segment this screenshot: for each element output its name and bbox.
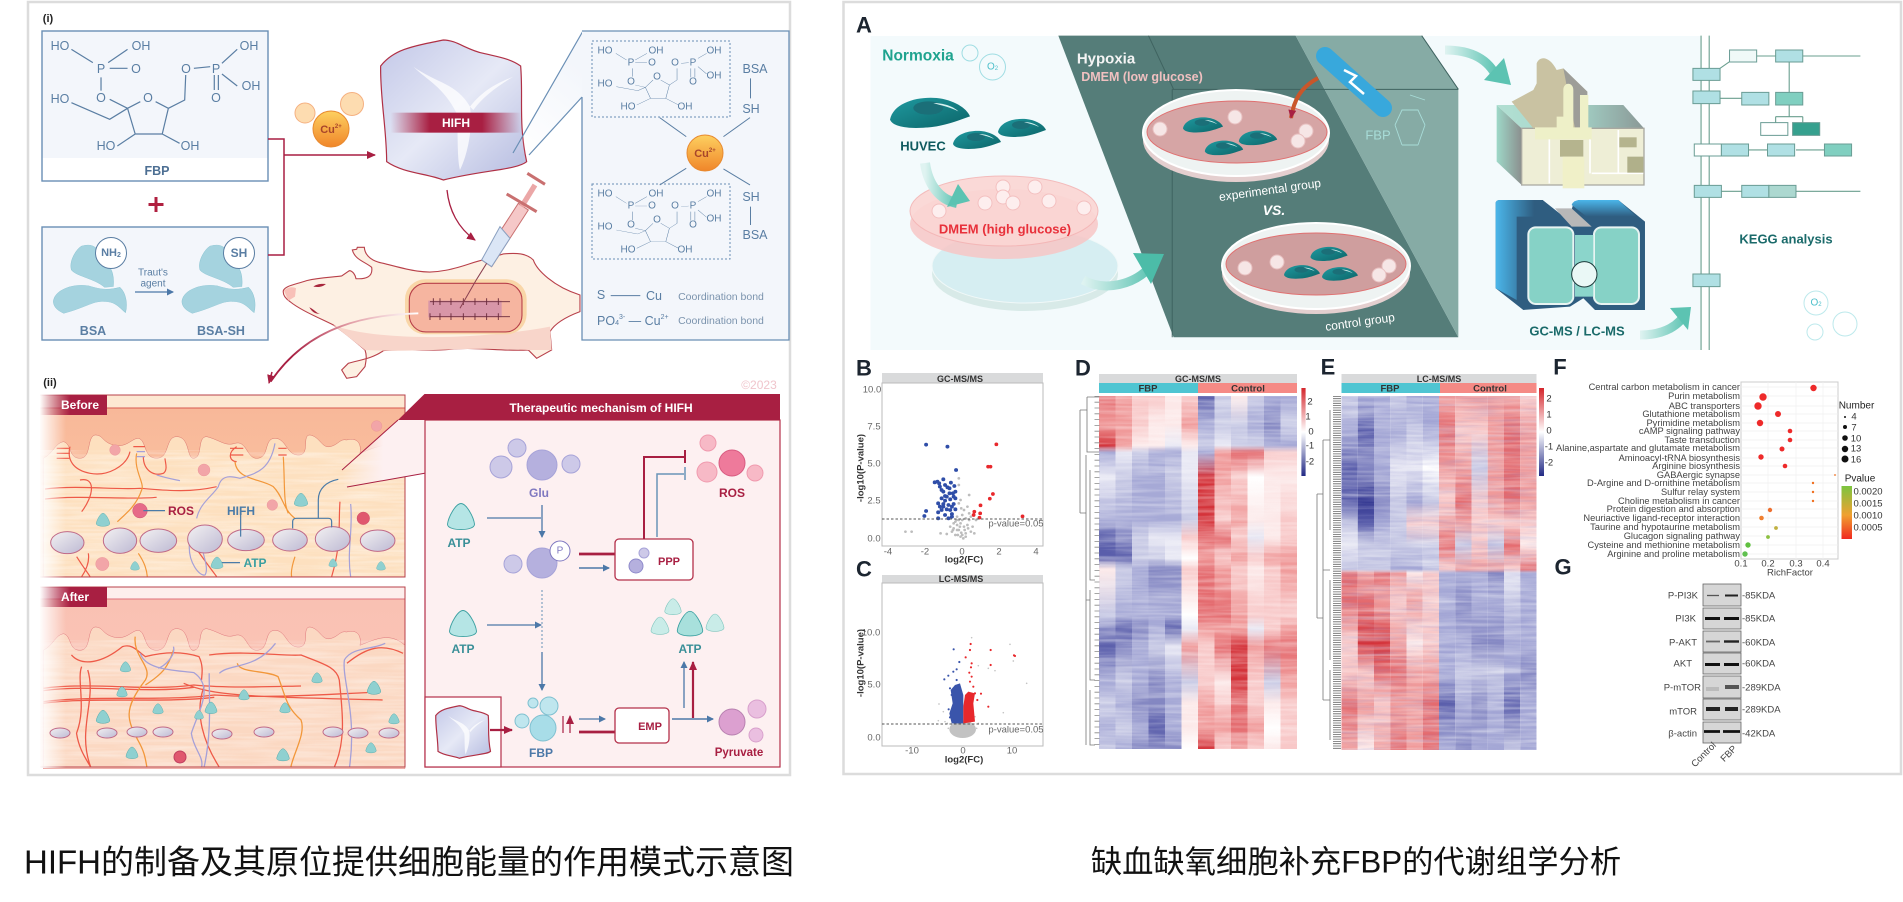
chart: KEGG enrichment bubble plot: 0.0020 <box>1853 486 1883 498</box>
chart: KEGG enrichment bubble plot: Central carbon metabolism in cancer <box>1589 382 1740 392</box>
icon: O2 bubbles KEGG <box>1804 291 1857 340</box>
chart: LC-MS volcano plot <box>856 574 1044 766</box>
chart: GC-MS volcano plot: p-value=0.05 <box>988 518 1044 530</box>
chart: western blot: -42KDA <box>1742 728 1776 740</box>
panel letter D: D <box>1075 356 1091 380</box>
chart: KEGG enrichment bubble plot: 13 <box>1851 444 1861 454</box>
box: BSA to BSA-SH: BSA <box>80 324 106 338</box>
chart: KEGG enrichment bubble plot: 0.0015 <box>1853 498 1883 510</box>
icon: Cu2+ ions: Cu <box>320 124 335 136</box>
box: FBP structure: O <box>131 62 141 76</box>
chart: KEGG enrichment bubble plot: Taste transduction <box>1665 435 1740 445</box>
box: BSA to BSA-SH: SH <box>231 246 247 260</box>
node: ATP upper: ATP <box>447 536 471 550</box>
callout: coordination structure: OH <box>648 46 664 56</box>
chart: LC-MS heatmap: 0 <box>1546 426 1552 436</box>
callout: coordination structure: OH <box>706 70 722 82</box>
callout: coordination structure: OH <box>648 188 664 200</box>
chart: western blot: -60KDA <box>1742 658 1776 670</box>
node: ATP lower: ATP <box>451 642 475 656</box>
callout: coordination structure: 4 <box>615 320 619 326</box>
chart: GC-MS volcano plot <box>856 373 1044 566</box>
chart: GC-MS heatmap: -1 <box>1306 440 1314 452</box>
arrow: up to ATP blue <box>683 662 685 708</box>
box: HIFH cube inset <box>425 697 501 767</box>
chart: western blot: -289KDA <box>1742 682 1781 694</box>
node: FBP <box>515 697 558 760</box>
illustration: FBP capsule <box>1325 56 1383 108</box>
chart: LC-MS volcano plot: 5.0 <box>867 680 881 690</box>
callout: coordination structure: Cu <box>694 148 709 160</box>
chart: KEGG enrichment bubble plot <box>1556 382 1883 578</box>
panel letter G: G <box>1554 554 1572 580</box>
chart: GC-MS volcano plot: 0 <box>959 546 965 558</box>
arrow: EMP to pyruvate <box>672 718 713 720</box>
chart: KEGG enrichment bubble plot: 0.0005 <box>1853 522 1883 534</box>
box: FBP structure: O <box>143 91 153 105</box>
chart: KEGG enrichment bubble plot: D-Argine and D-ornithine metabolism <box>1587 478 1740 488</box>
chart: GC-MS volcano plot: 5.0 <box>867 458 881 470</box>
box: FBP structure: FBP <box>144 164 170 178</box>
chart: GC-MS heatmap: 1 <box>1305 412 1311 422</box>
callout cone: zoom to mechanism <box>342 420 426 487</box>
chart: western blot: -60KDA <box>1742 638 1776 648</box>
chart: KEGG enrichment bubble plot: Number <box>1839 400 1875 412</box>
node: pyruvate <box>715 700 766 759</box>
chart: KEGG enrichment bubble plot: 0.4 <box>1816 558 1830 570</box>
heading banner <box>398 394 780 420</box>
arrow: ATP lower consumed <box>487 624 541 626</box>
arrow: tail of injection site to detail <box>269 372 272 383</box>
label: KEGG analysis: KEGG analysis <box>1739 232 1833 246</box>
chart: GC-MS volcano plot: 2 <box>996 546 1002 558</box>
illustration: high glucose dish <box>910 176 1118 311</box>
callout: coordination structure: O <box>653 214 661 226</box>
panel: before treatment skin: ATP <box>243 556 267 570</box>
chart: GC-MS volcano plot: GC-MS/MS <box>937 374 983 384</box>
arrows: glucose phosphorylation <box>487 505 542 537</box>
illustration: syringe <box>460 173 545 308</box>
illustration: HIFH hydrogel block <box>381 40 527 180</box>
heading banner: Therapeutic mechanism of HIFH <box>509 401 693 415</box>
panel: metabolomics figure <box>844 2 1901 774</box>
pathway: dotted to FBP <box>541 590 543 650</box>
chart: GC-MS volcano plot: log2(FC) <box>945 554 983 566</box>
chart: western blot <box>1664 584 1781 770</box>
chart: GC-MS heatmap: Control <box>1231 384 1265 394</box>
callout: coordination structure: O <box>648 58 656 68</box>
chart: GC-MS heatmap: -2 <box>1306 456 1314 468</box>
chart: KEGG enrichment bubble plot: Sulfur relay system <box>1661 487 1740 497</box>
callout: coordination structure: HO <box>598 188 613 200</box>
box: FBP structure: OH <box>181 139 199 153</box>
chart: GC-MS heatmap: 0 <box>1308 426 1314 438</box>
node: phosphorylated glucose: P <box>557 546 564 556</box>
callout: coordination structure: Coordination bond <box>678 291 764 303</box>
node: phosphorylated glucose <box>504 541 570 578</box>
label: VS.: VS. <box>1263 202 1285 218</box>
chart: KEGG enrichment bubble plot: Arginine and proline metabolism <box>1607 549 1740 559</box>
illustration: rat with implanted hydrogel <box>271 247 580 382</box>
chart: KEGG pathway map <box>1693 36 1860 350</box>
panel letter B: B <box>856 356 872 380</box>
callout: coordination structure: HO <box>598 222 613 232</box>
node: ATP upper <box>447 504 474 550</box>
panel: after treatment skin: After <box>61 590 89 604</box>
box: FBP structure: OH <box>240 39 258 53</box>
callout: coordination structure: OH <box>678 102 692 112</box>
chart: KEGG enrichment bubble plot: ABC transporters <box>1669 401 1740 411</box>
chart: KEGG enrichment bubble plot: RichFactor <box>1767 568 1813 578</box>
chart: KEGG enrichment bubble plot: Glucagon signaling pathway <box>1624 531 1740 541</box>
caption: right figure: 缺血缺氧细胞补充FBP的代谢组学分析 <box>1091 844 1621 880</box>
chart: KEGG enrichment bubble plot: 10 <box>1851 434 1861 444</box>
illustration: LC-MS instrument <box>1496 200 1645 310</box>
label: control group: control group <box>1324 310 1396 334</box>
callout: coordination structure: BSA <box>742 62 768 76</box>
box: BSA to BSA-SH: Traut's <box>138 268 168 278</box>
box: FBP structure: HO <box>51 92 70 106</box>
panel: HIFH preparation and mode of action figure <box>28 2 790 775</box>
box: BSA to BSA-SH: 2 <box>117 252 121 258</box>
chart: KEGG enrichment bubble plot: GABAergic synapse <box>1657 470 1740 480</box>
panel: before treatment skin <box>39 394 405 578</box>
callout: coordination structure: 3- <box>619 314 626 320</box>
callout: coordination structure: O <box>627 220 635 230</box>
callout: coordination structure: O <box>689 220 697 230</box>
arrow: to PPP red <box>579 553 630 555</box>
chart: GC-MS volcano plot: 7.5 <box>867 422 881 432</box>
chart: KEGG enrichment bubble plot: Protein digestion and absorption <box>1607 504 1740 514</box>
arrow: to EMP blue <box>579 718 605 720</box>
callout: coordination structure: O <box>671 58 679 68</box>
callout: coordination structure: — Cu <box>625 314 661 328</box>
chart: western blot: P-AKT <box>1669 638 1697 648</box>
arrow: down to FBP <box>541 652 543 690</box>
box: FBP structure: HO <box>97 139 116 153</box>
chart: KEGG enrichment bubble plot: Pyrimidine metabolism <box>1646 418 1740 428</box>
chart: KEGG enrichment bubble plot: Cysteine and methionine metabolism <box>1588 540 1740 550</box>
chart: LC-MS heatmap: -2 <box>1545 458 1553 468</box>
arrow: to PPP blue <box>579 567 609 569</box>
callout: coordination structure: OH <box>706 188 722 200</box>
chart: LC-MS heatmap: FBP <box>1380 384 1400 394</box>
chart: GC-MS volcano plot: 4 <box>1033 546 1039 558</box>
chart: western blot: -85KDA <box>1742 614 1776 624</box>
chart: GC-MS volcano plot: -4 <box>884 546 892 558</box>
chart: western blot: P-PI3K <box>1668 590 1699 602</box>
inhibition line: PPP to ROS red <box>644 450 685 539</box>
chart: western blot: β-actin <box>1668 728 1697 740</box>
callout: coordination structure: P <box>690 58 697 68</box>
chart: LC-MS volcano plot: 0.0 <box>867 732 881 744</box>
chart: KEGG enrichment bubble plot: Alanine,aspartate and glutamate metabolism <box>1556 443 1740 453</box>
arrow: hydrogel to rat <box>447 190 475 240</box>
chart: LC-MS heatmap <box>1317 374 1553 750</box>
node: Glu: Glu <box>529 486 549 500</box>
icon: O2 bubbles normoxia: 2 <box>995 66 999 72</box>
chart: LC-MS volcano plot: -log10(P-value) <box>856 629 866 697</box>
arrow: FBP into dish <box>1291 78 1318 118</box>
chart: KEGG enrichment bubble plot: cAMP signaling pathway <box>1639 426 1740 436</box>
node: Glu <box>490 439 580 500</box>
callout: coordination structure: HO <box>620 102 636 112</box>
chart: GC-MS volcano plot: 0.0 <box>867 534 881 544</box>
panel letter C: C <box>856 556 872 582</box>
chart: KEGG enrichment bubble plot: Aminoacyl-tRNA biosynthesis <box>1619 453 1740 463</box>
label: normoxia: Normoxia <box>882 48 954 64</box>
callout: coordination structure: Cu <box>646 289 662 303</box>
caption: left figure: HIFH的制备及其原位提供细胞能量的作用模式示意图 <box>24 844 794 880</box>
chart: western blot: -289KDA <box>1742 704 1781 716</box>
callout: coordination structure: O <box>648 200 656 212</box>
label: experimental group: experimental group <box>1218 176 1322 204</box>
box: PPP <box>615 539 693 580</box>
chart: LC-MS heatmap: -1 <box>1545 442 1553 452</box>
arrow: cells into dish <box>925 163 970 207</box>
chart: LC-MS volcano plot: 10 <box>1007 746 1017 756</box>
chart: KEGG enrichment bubble plot: 0.3 <box>1789 558 1803 570</box>
box: FBP structure: O <box>181 62 191 76</box>
chart: LC-MS volcano plot: LC-MS/MS <box>939 574 983 584</box>
box: FBP structure <box>42 31 268 181</box>
callout: coordination structure: 2+ <box>709 148 716 154</box>
chart: GC-MS heatmap: 2 <box>1307 396 1313 408</box>
label: FBP with faint structure <box>1365 95 1425 145</box>
chart: KEGG enrichment bubble plot: Choline metabolism in cancer <box>1618 496 1740 506</box>
panel: after treatment skin <box>39 586 405 769</box>
callout: coordination structure: PO <box>597 314 615 328</box>
callout: coordination structure: HO <box>598 46 613 56</box>
chart: western blot: P-mTOR <box>1664 682 1701 694</box>
icon: plus sign <box>148 197 164 212</box>
box: FBP structure: P <box>97 62 105 76</box>
chart: western blot: FBP <box>1719 744 1739 764</box>
panel: before treatment skin: HIFH <box>227 504 255 518</box>
arrows: FBP increase <box>563 716 570 733</box>
callout: coordination structure: P <box>628 58 635 68</box>
icon: Cu2+ ions <box>295 92 364 147</box>
illustration: control dish <box>1222 223 1410 314</box>
signature: ©2023 <box>741 378 777 392</box>
illustration: high glucose dish: DMEM (high glucose) <box>939 222 1071 236</box>
chart: KEGG enrichment bubble plot: Pvalue <box>1845 474 1876 484</box>
arrow: to EMP red <box>579 731 630 733</box>
box: BSA to BSA-SH: BSA-SH <box>197 324 245 338</box>
callout: coordination structure: 2+ <box>661 314 669 320</box>
chart: KEGG enrichment bubble plot: 4 <box>1851 412 1857 422</box>
chart: LC-MS heatmap: Control <box>1473 384 1507 394</box>
node: pyruvate: Pyruvate <box>715 747 763 759</box>
callout: coordination structure: HO <box>598 78 613 90</box>
panel: therapeutic mechanism of HIFH <box>398 394 780 767</box>
chart: GC-MS volcano plot: 2.5 <box>867 496 881 506</box>
panel A: workflow background <box>870 36 1700 350</box>
chart: LC-MS volcano plot: 0 <box>960 746 966 756</box>
icon: O2 bubbles normoxia: O <box>987 62 995 72</box>
chart: LC-MS volcano plot: p-value=0.05 <box>988 724 1044 736</box>
chart: LC-MS volcano plot: -10 <box>905 746 919 756</box>
chart: LC-MS volcano plot: log2(FC) <box>945 754 983 766</box>
callout: coordination structure: P <box>628 200 635 212</box>
box: FBP structure: O <box>211 91 221 105</box>
callout: coordination structure: Coordination bond <box>678 315 764 327</box>
callout: coordination structure: OH <box>706 46 722 56</box>
box: FBP structure: OH <box>242 79 260 93</box>
illustration: HIFH hydrogel block: HIFH <box>442 116 470 130</box>
chart: KEGG enrichment bubble plot: Glutathione metabolism <box>1642 409 1740 419</box>
icon: O2 bubbles normoxia <box>962 45 1006 80</box>
box: PPP: PPP <box>658 556 680 568</box>
icon: O2 bubbles KEGG: 2 <box>1818 302 1822 308</box>
box: EMP <box>615 708 669 743</box>
box: BSA to BSA-SH <box>42 227 268 340</box>
node: ATP produced: ATP <box>678 642 702 656</box>
panel letter A: A <box>856 12 872 38</box>
chart: KEGG enrichment bubble plot: 16 <box>1851 454 1861 466</box>
label: (ii): (ii) <box>43 377 57 389</box>
box: BSA to BSA-SH: NH <box>101 247 117 259</box>
chart: KEGG enrichment bubble plot: 0.1 <box>1734 558 1748 570</box>
arrow: instruments to KEGG <box>1640 307 1691 335</box>
box: FBP structure: OH <box>132 39 150 53</box>
chart: GC-MS volcano plot: -2 <box>921 546 929 558</box>
icon: HUVEC cells <box>890 98 1046 149</box>
box: FBP structure: P <box>212 62 220 76</box>
callout: coordination structure: HO <box>620 244 636 256</box>
chart: GC-MS heatmap: FBP <box>1138 384 1158 394</box>
box: FBP structure: HO <box>51 39 70 53</box>
label: GC-MS / LC-MS: GC-MS / LC-MS <box>1529 324 1625 338</box>
box: EMP: EMP <box>638 721 662 733</box>
panel: before treatment skin: ROS <box>168 504 194 518</box>
illustration: GC-MS instrument <box>1497 58 1644 188</box>
node: ROS: ROS <box>719 486 745 500</box>
panel letter F: F <box>1553 354 1567 380</box>
chart: KEGG enrichment bubble plot: Purin metabolism <box>1668 391 1740 401</box>
label: FBP with faint structure: FBP <box>1365 128 1391 142</box>
chart: western blot: PI3K <box>1675 614 1697 624</box>
label: low glucose medium: DMEM (low glucose) <box>1081 70 1203 84</box>
chart: KEGG enrichment bubble plot: 7 <box>1851 422 1857 434</box>
callout: coordination structure: O <box>627 76 635 88</box>
node: ROS <box>697 435 763 500</box>
node: FBP: FBP <box>529 746 553 760</box>
arrow: chamber to instruments <box>1445 50 1511 85</box>
chart: KEGG enrichment bubble plot: Arginine biosynthesis <box>1652 461 1740 471</box>
box: FBP structure: O <box>96 91 106 105</box>
node: ATP produced <box>651 599 724 656</box>
callout: coordination structure: O <box>653 72 661 82</box>
chart: GC-MS heatmap: GC-MS/MS <box>1175 374 1221 384</box>
arrow: combine to HIFH <box>268 139 375 255</box>
arrow: dish into hypoxia <box>1083 253 1164 286</box>
callout: coordination structure: SH <box>742 102 760 116</box>
callout: coordination structure: BSA <box>742 228 768 242</box>
arrow: cube releases FBP <box>490 729 512 731</box>
chart: GC-MS heatmap <box>1080 374 1314 749</box>
chart: GC-MS volcano plot: 10.0 <box>863 384 881 396</box>
callout: coordination structure: O <box>689 76 697 88</box>
chart: KEGG enrichment bubble plot: Taurine and hypotaurine metabolism <box>1590 522 1740 532</box>
box: BSA to BSA-SH: agent <box>140 278 166 290</box>
illustration: experimental dish <box>1143 90 1329 182</box>
callout: coordination structure: O <box>671 200 679 212</box>
chart: KEGG enrichment bubble plot: 0.0010 <box>1853 510 1883 522</box>
inhibition line: PPP to ROS blue <box>657 467 685 537</box>
chart: LC-MS heatmap: 2 <box>1546 394 1552 404</box>
panel letter E: E <box>1321 354 1335 380</box>
callout: coordination structure: SH <box>742 190 760 204</box>
chart: western blot: Control <box>1689 740 1719 770</box>
chart: LC-MS heatmap: 1 <box>1546 410 1552 420</box>
label: hypoxia: Hypoxia <box>1077 50 1136 68</box>
icon: Cu2+ ions: 2+ <box>335 124 342 130</box>
icon: O2 bubbles KEGG: O <box>1810 298 1818 308</box>
callout: coordination structure: P <box>690 200 697 212</box>
chart: KEGG enrichment bubble plot: Neuriactive ligand-receptor interaction <box>1583 513 1740 523</box>
chart: western blot: -85KDA <box>1742 590 1776 602</box>
chart: western blot: mTOR <box>1669 706 1697 718</box>
chart: KEGG enrichment bubble plot: 0.2 <box>1761 558 1775 570</box>
callout: coordination structure: S <box>597 288 605 302</box>
chart: LC-MS heatmap: LC-MS/MS <box>1417 374 1461 384</box>
label: (i): (i) <box>43 13 54 25</box>
panel: before treatment skin: Before <box>61 398 99 412</box>
illustration: hypoxia chamber <box>1058 36 1458 337</box>
callout: coordination structure: OH <box>678 244 692 256</box>
label: HUVEC: HUVEC <box>900 138 946 154</box>
node: ATP lower <box>450 610 476 656</box>
callout: coordination structure: OH <box>706 214 722 224</box>
arrow: up to ATP red <box>692 662 694 718</box>
chart: GC-MS volcano plot: -log10(P-value) <box>856 434 866 502</box>
callout: coordination structure <box>513 31 789 340</box>
chart: LC-MS volcano plot: 10.0 <box>862 628 880 638</box>
chart: western blot: AKT <box>1674 658 1692 670</box>
